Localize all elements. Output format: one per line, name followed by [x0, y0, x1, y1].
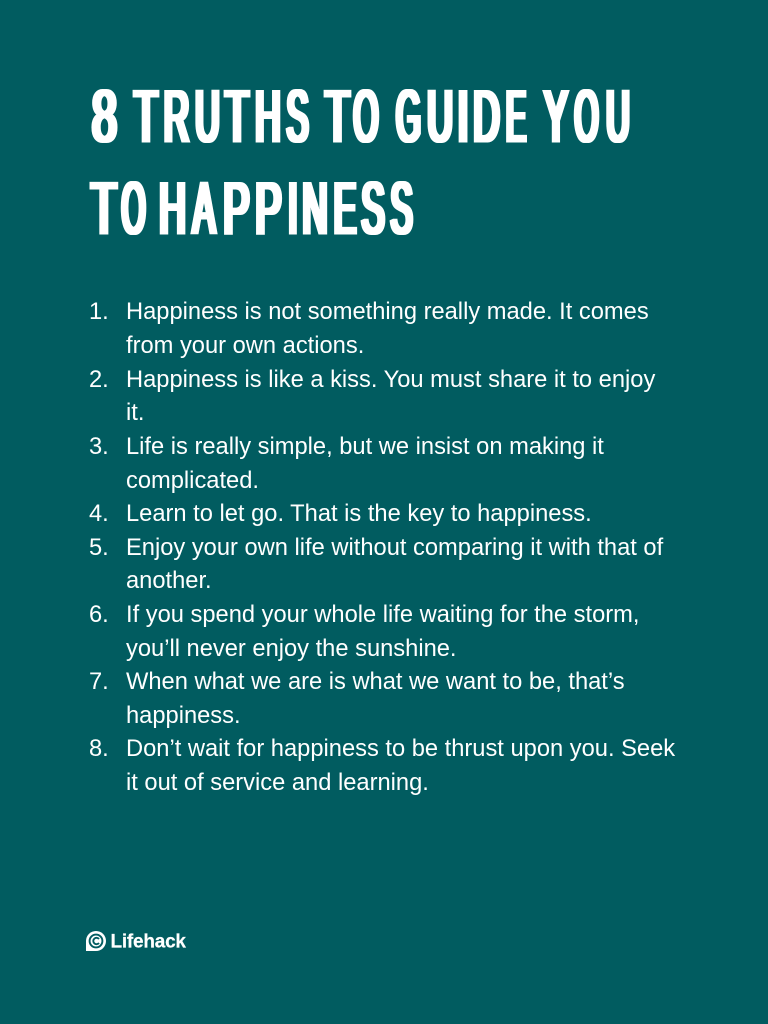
truth 6 [89, 602, 639, 662]
truth 7 [89, 669, 625, 729]
title: P [255, 168, 282, 250]
title: E [506, 76, 526, 158]
title: N [302, 168, 328, 250]
truth 7: 7. [89, 669, 109, 695]
truth 1: Happiness is not something really made. It comes [126, 299, 649, 325]
title: I [457, 76, 469, 158]
truth 8: Don’t wait for happiness to be thrust upon you. Seek [126, 736, 675, 762]
title: U [606, 76, 630, 158]
truth 1: 1. [89, 299, 109, 325]
title: H [159, 168, 186, 250]
title: S [287, 76, 308, 158]
truth 3: Life is really simple, but we insist on making it [126, 434, 604, 460]
title: I [288, 168, 297, 250]
truth 5: 5. [89, 535, 109, 561]
title: O [575, 76, 598, 158]
title: A [193, 168, 215, 250]
truth 2 [89, 367, 656, 426]
truth 8: 8. [89, 736, 109, 762]
numbered list of truths [89, 299, 676, 796]
wordmark: Lifehack [110, 932, 186, 952]
truth 2: 2. [89, 367, 109, 393]
truth 8 [89, 736, 676, 796]
truth 6: you’ll never enjoy the sunshine. [126, 636, 457, 662]
title [90, 76, 630, 250]
title: T [225, 76, 249, 158]
truth 3: 3. [89, 434, 109, 460]
title: T [325, 76, 350, 158]
title: O [122, 168, 145, 250]
truth 5 [89, 535, 664, 594]
title: Y [544, 76, 568, 158]
truth 4: 4. [89, 501, 109, 527]
truth 4: Learn to let go. That is the key to happiness. [126, 501, 592, 527]
truth 2: it. [126, 400, 144, 426]
truth 3 [89, 434, 604, 494]
title: U [195, 76, 220, 158]
title: D [473, 76, 500, 158]
title: R [164, 76, 189, 158]
truth 8: it out of service and learning. [126, 770, 429, 796]
title: P [223, 168, 250, 250]
title: U [427, 76, 453, 158]
logo: Lifehack [86, 931, 186, 952]
title: S [391, 168, 412, 250]
title: H [255, 76, 281, 158]
title: G [396, 76, 421, 158]
truth 1 [89, 299, 649, 359]
truth 5: Enjoy your own life without comparing it with that of [126, 535, 663, 561]
title: 8 [92, 76, 117, 158]
icon: Lifehack spiral badge [86, 931, 106, 951]
truth 1: from your own actions. [126, 333, 364, 359]
title: T [134, 76, 158, 158]
title: S [362, 168, 384, 250]
title: T [91, 168, 117, 250]
truth 5: another. [126, 568, 212, 594]
truth 7: happiness. [126, 703, 241, 729]
truth 7: When what we are is what we want to be, that’s [126, 669, 625, 695]
truth 2: Happiness is like a kiss. You must share it to enjoy [126, 367, 655, 393]
truth 6: 6. [89, 602, 109, 628]
truth 3: complicated. [126, 468, 259, 494]
title: E [334, 168, 356, 250]
truth 6: If you spend your whole life waiting for the storm, [126, 602, 639, 628]
title: O [354, 76, 378, 158]
